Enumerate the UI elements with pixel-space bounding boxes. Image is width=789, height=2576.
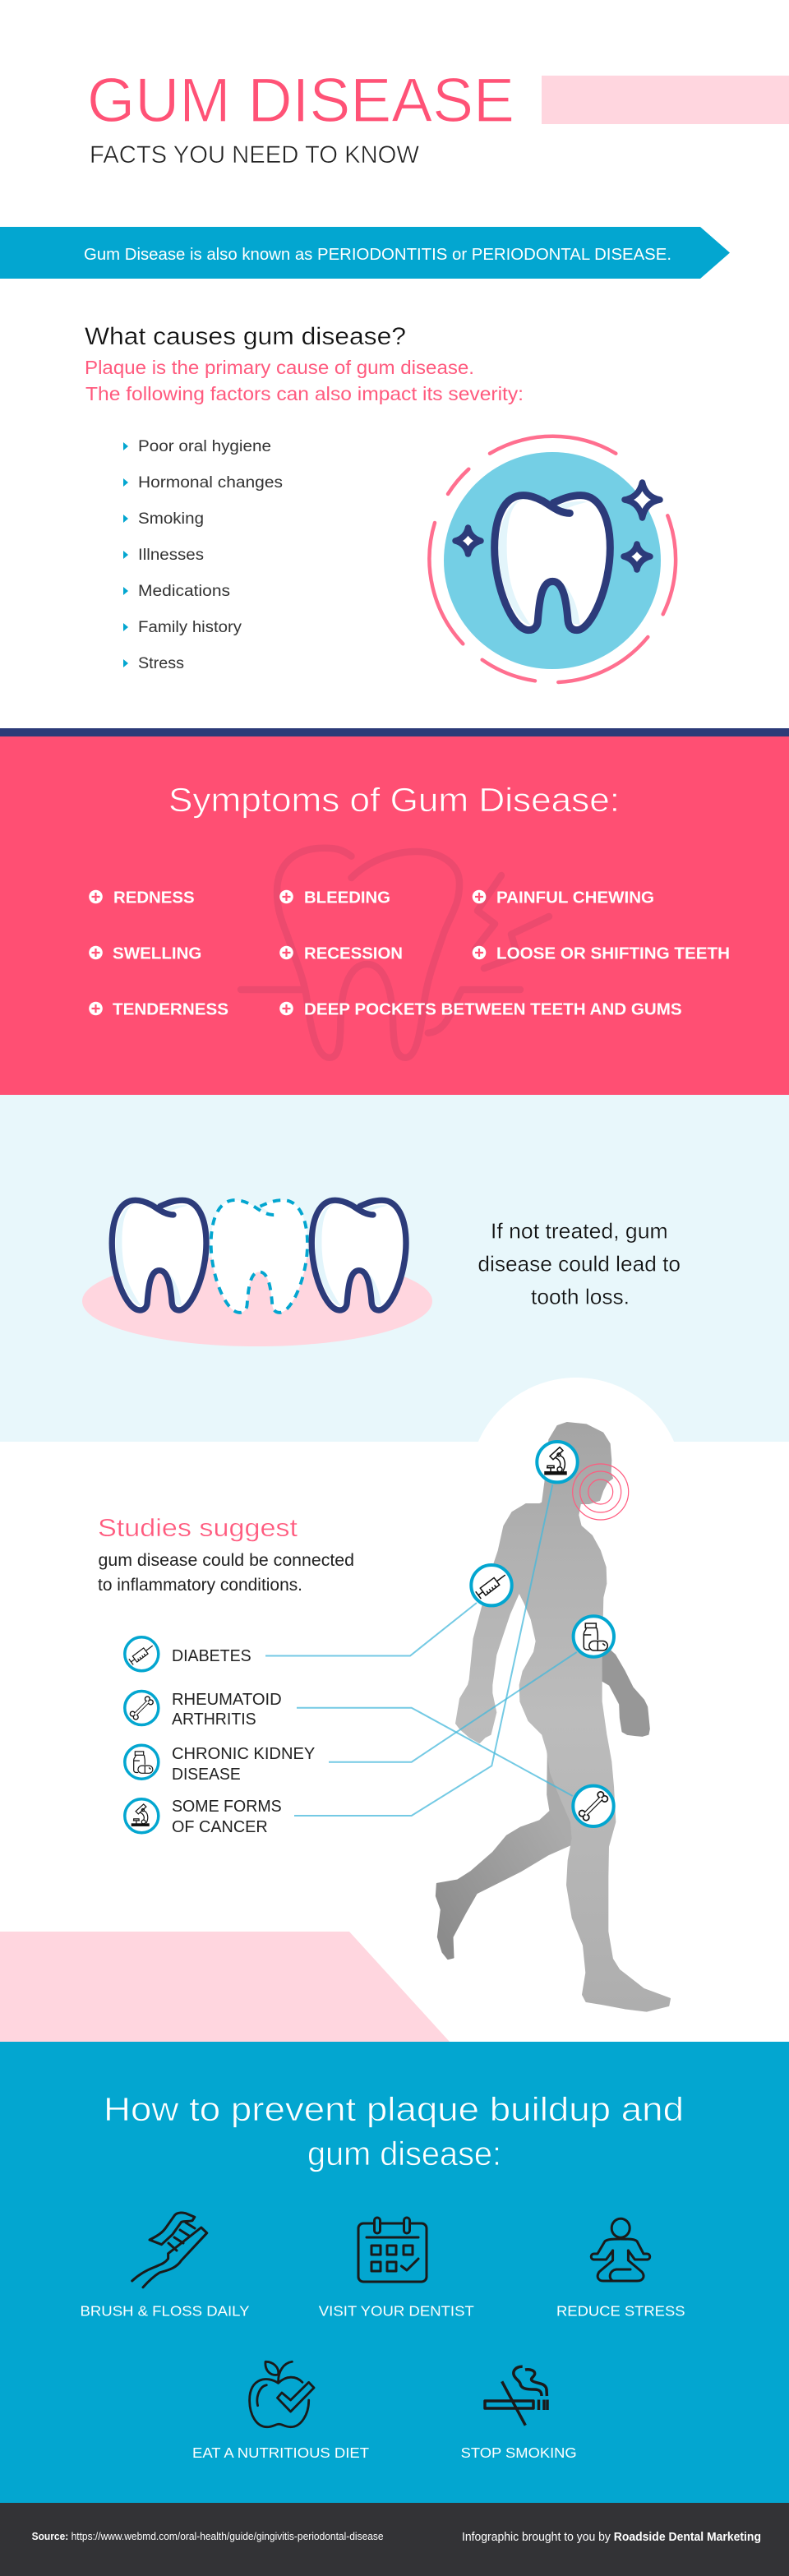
ghost tooth watermark [241, 848, 549, 1058]
human figure [436, 1423, 670, 2011]
causes list: Medications [138, 583, 230, 600]
condition: rheumatoid arthritis: ARTHRITIS [172, 1710, 256, 1729]
banner arrow [0, 227, 730, 279]
symptom labels: DEEP POCKETS BETWEEN TEETH AND GUMS [304, 999, 682, 1019]
condition: diabetes [125, 1637, 251, 1671]
symptom labels: BLEEDING [304, 888, 390, 907]
icon: right tooth [311, 1200, 406, 1310]
panel: prevention [0, 2042, 789, 2503]
icon: toothbrush [132, 2213, 207, 2287]
prevention heading: gum disease: [307, 2135, 501, 2172]
condition: some forms of cancer [125, 1798, 282, 1836]
causes list: Family history [138, 619, 242, 636]
prevention heading [104, 2090, 684, 2172]
symptom labels: SWELLING [113, 944, 201, 963]
symptom labels: REDNESS [113, 888, 195, 907]
icon: left tooth [112, 1200, 206, 1310]
studies heading: Studies suggest [98, 1513, 298, 1542]
icon: missing tooth [211, 1200, 307, 1313]
panel: symptoms [0, 736, 789, 1095]
studies text: to inflammatory conditions. [98, 1576, 302, 1595]
causes intro [85, 357, 524, 404]
causes intro: The following factors can also impact its severity: [85, 383, 524, 404]
header [87, 66, 789, 169]
body marker: bone [573, 1786, 614, 1826]
subtitle: FACTS YOU NEED TO KNOW [90, 141, 420, 169]
tooth loss text [478, 1219, 681, 1309]
symptoms heading: Symptoms of Gum Disease: [168, 781, 620, 819]
label: brush and floss: BRUSH & FLOSS DAILY [81, 2302, 250, 2319]
causes list: Hormonal changes [138, 474, 283, 492]
condition: chronic kidney disease: CHRONIC KIDNEY [172, 1745, 315, 1763]
pain rings [573, 1464, 629, 1520]
condition: some forms of cancer: SOME FORMS [172, 1798, 282, 1816]
panel: studies [0, 1378, 789, 2042]
condition: chronic kidney disease: DISEASE [172, 1766, 241, 1784]
prevention heading: How to prevent plaque buildup and [104, 2090, 684, 2128]
causes heading: What causes gum disease? [85, 323, 406, 350]
causes list: Stress [138, 655, 184, 672]
causes intro: Plaque is the primary cause of gum disease. [85, 357, 474, 378]
label: visit dentist: VISIT YOUR DENTIST [319, 2302, 474, 2319]
title accent bar [542, 76, 789, 124]
source: Source: https://www.webmd.com/oral-health/guide/gingivitis-periodontal-disease [32, 2530, 384, 2542]
tooth loss text: tooth loss. [531, 1285, 630, 1309]
body marker: microscope [537, 1442, 578, 1482]
tooth loss text: disease could lead to [478, 1252, 681, 1276]
symptom labels [113, 888, 730, 1019]
condition: rheumatoid arthritis: RHEUMATOID [172, 1691, 282, 1709]
icon: sparkling tooth [429, 436, 676, 682]
body marker: syringe [471, 1565, 512, 1605]
head bump [469, 1378, 683, 1591]
icon: meditation [591, 2218, 650, 2281]
connector lines [265, 1484, 577, 1816]
icon: no smoking [485, 2366, 547, 2426]
gum ellipse [82, 1256, 432, 1346]
symptom bullets [89, 890, 486, 1015]
studies text: gum disease could be connected [99, 1551, 354, 1570]
studies text [98, 1551, 354, 1595]
panel: tooth loss [0, 1095, 789, 1442]
icon: apple [250, 2361, 314, 2427]
condition: some forms of cancer: OF CANCER [172, 1818, 268, 1836]
symptom labels: LOOSE OR SHIFTING TEETH [496, 944, 730, 963]
symptom labels: PAINFUL CHEWING [496, 888, 654, 907]
icon: calendar [358, 2218, 427, 2282]
label: stop smoking: STOP SMOKING [461, 2444, 577, 2461]
symptom labels: TENDERNESS [113, 999, 228, 1019]
causes list: Poor oral hygiene [138, 438, 271, 455]
condition: chronic kidney disease [125, 1745, 315, 1784]
symptom labels: RECESSION [304, 944, 403, 963]
title: GUM DISEASE [87, 66, 514, 136]
condition: rheumatoid arthritis [125, 1691, 282, 1729]
causes list [123, 438, 283, 672]
pink corner [0, 1932, 450, 2042]
label: nutritious diet: EAT A NUTRITIOUS DIET [192, 2444, 369, 2461]
causes list: Illnesses [138, 547, 204, 564]
footer [0, 2503, 789, 2576]
panel: causes [85, 323, 676, 682]
tooth loss text: If not treated, gum [491, 1219, 668, 1244]
navy divider [0, 728, 789, 736]
credit: Infographic brought to you by Roadside Dental Marketing [462, 2531, 761, 2544]
causes list: Smoking [138, 510, 204, 528]
banner text: Gum Disease is also known as PERIODONTITIS or PERIODONTAL DISEASE. [84, 246, 671, 264]
body marker: medicine [574, 1616, 614, 1657]
label: reduce stress: REDUCE STRESS [556, 2302, 685, 2319]
condition: diabetes: DIABETES [172, 1647, 251, 1665]
